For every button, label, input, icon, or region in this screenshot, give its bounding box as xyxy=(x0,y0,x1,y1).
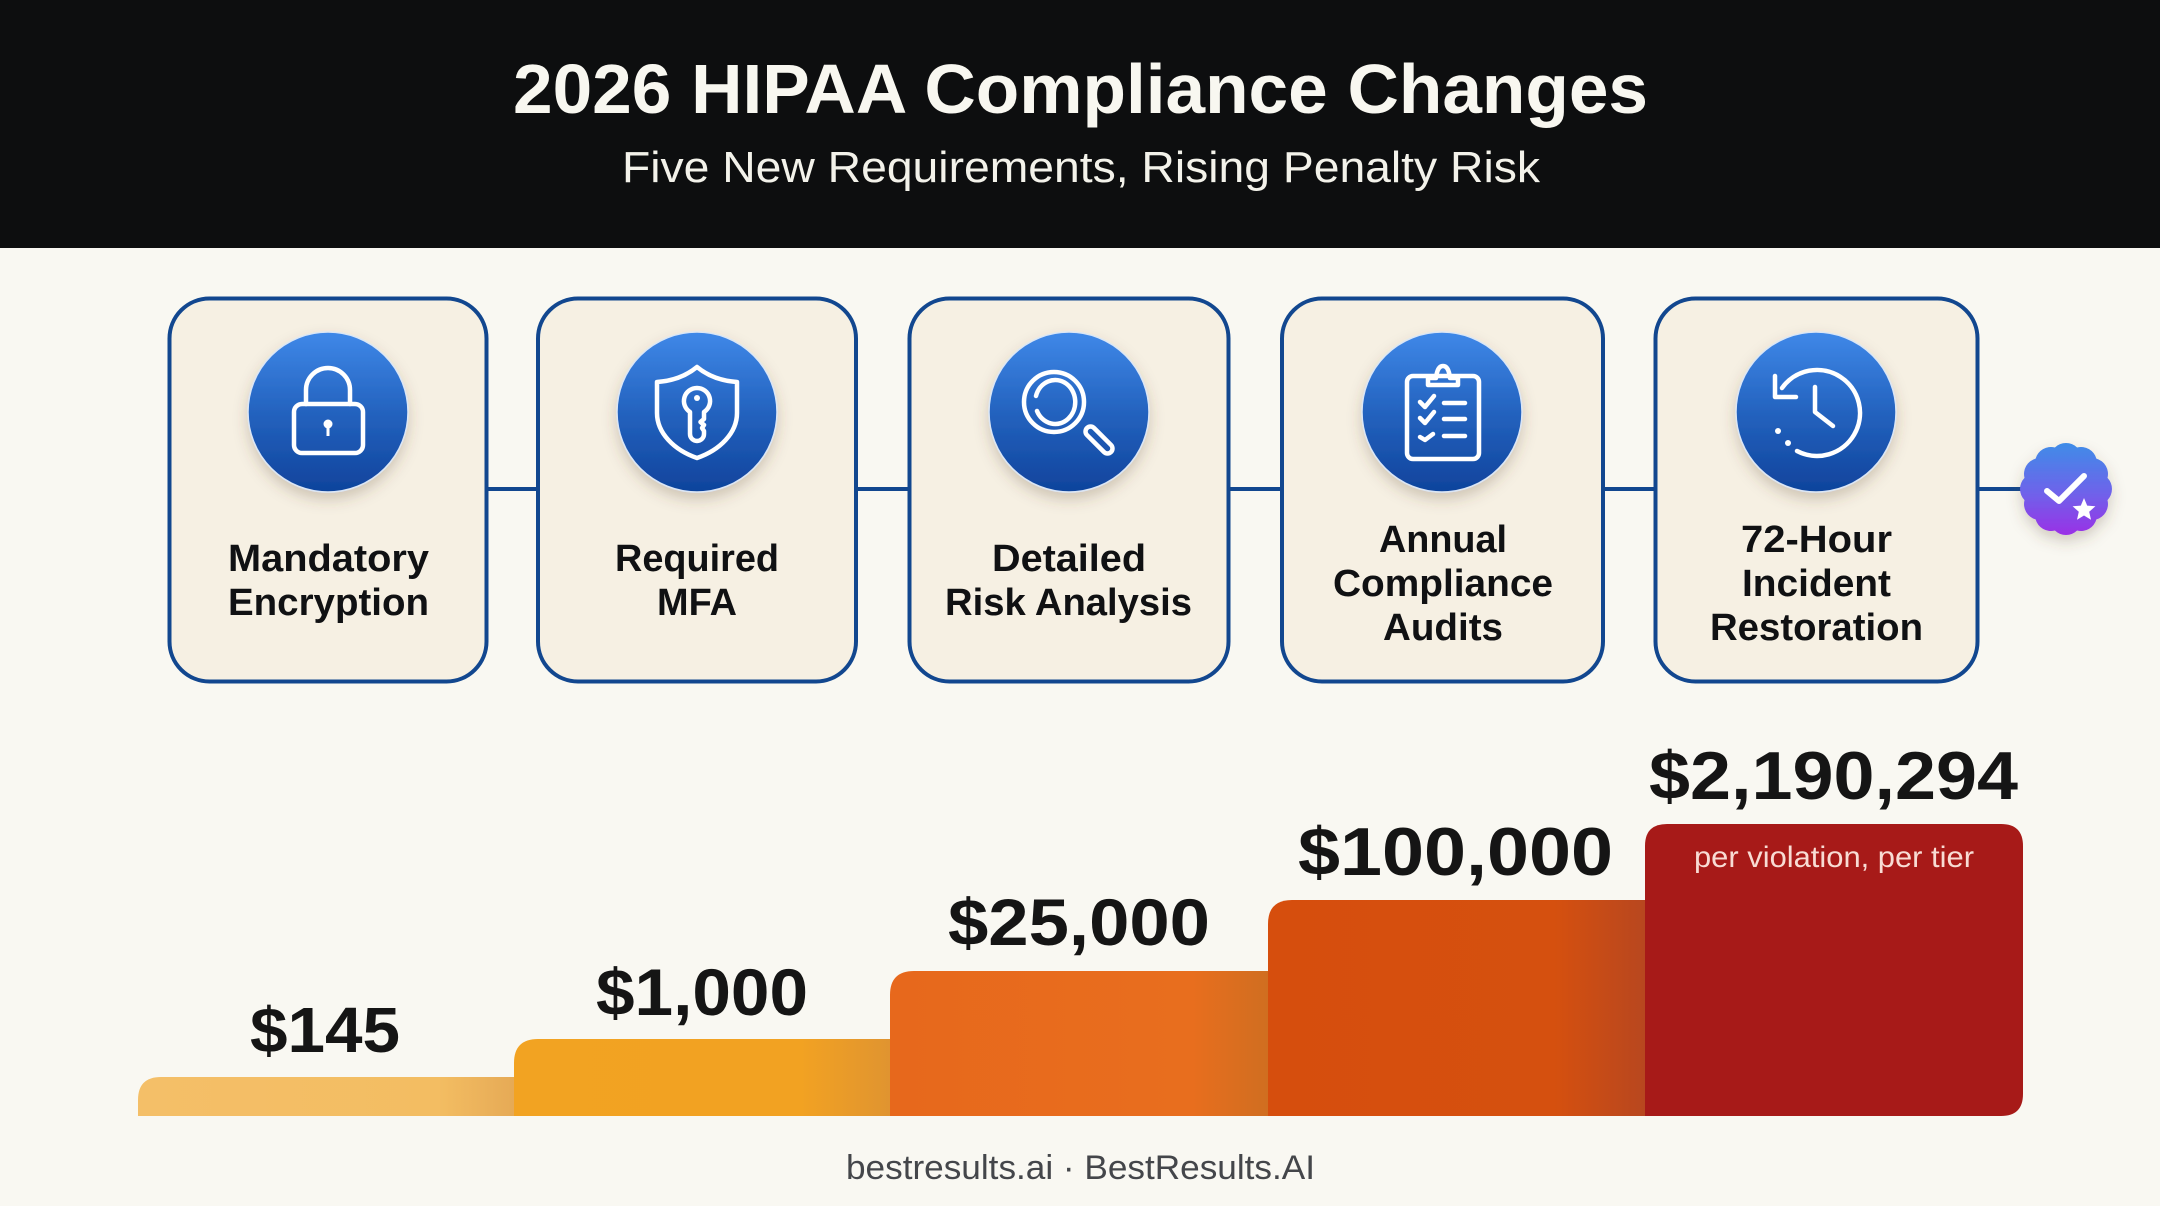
label: Restoration xyxy=(1710,607,1923,649)
icon: verified badge xyxy=(2020,443,2112,535)
value: $1,000: $1,000 xyxy=(596,955,808,1029)
header band xyxy=(0,0,2160,248)
bar note: per violation, per tier xyxy=(1694,841,1974,874)
bar: tier 2 xyxy=(514,1039,890,1116)
title: 2026 HIPAA Compliance Changes xyxy=(513,50,1648,128)
subtitle: Five New Requirements, Rising Penalty Risk xyxy=(622,143,1541,192)
value: $145: $145 xyxy=(250,994,400,1066)
panel: 72-hour incident restoration xyxy=(1656,298,1978,682)
label: Detailed xyxy=(992,538,1146,580)
icon: padlock xyxy=(248,332,408,492)
connector lines xyxy=(488,487,2022,491)
value: $100,000: $100,000 xyxy=(1298,814,1613,890)
icon: clock with history arrow xyxy=(1736,332,1896,492)
label: MFA xyxy=(657,582,737,624)
label: Annual xyxy=(1379,519,1507,561)
panel: annual compliance audits xyxy=(1282,298,1603,682)
icon: shield with key xyxy=(617,332,777,492)
value: $2,190,294: $2,190,294 xyxy=(1649,738,2018,814)
icon: magnifying glass xyxy=(989,332,1149,492)
value: $25,000: $25,000 xyxy=(948,885,1210,959)
icon: clipboard checklist xyxy=(1362,332,1522,492)
label: Risk Analysis xyxy=(945,582,1192,624)
bar: tier 1 xyxy=(138,1077,514,1116)
bar chart: penalty tiers xyxy=(138,738,2023,1116)
bar: tier 5 xyxy=(1645,824,2023,1116)
bar: tier 4 xyxy=(1268,900,1645,1116)
label: Incident xyxy=(1742,563,1891,605)
label: 72-Hour xyxy=(1741,519,1892,561)
footer: bestresults.ai · BestResults.AI xyxy=(846,1149,1315,1187)
label: Audits xyxy=(1383,607,1503,649)
panel: required MFA xyxy=(538,298,856,682)
label: Encryption xyxy=(228,582,429,624)
label: Required xyxy=(615,538,779,580)
label: Mandatory xyxy=(228,538,429,580)
panel: mandatory encryption xyxy=(170,298,486,682)
bar: tier 3 xyxy=(890,971,1268,1116)
panel: detailed risk analysis xyxy=(910,298,1228,682)
label: Compliance xyxy=(1333,563,1553,605)
